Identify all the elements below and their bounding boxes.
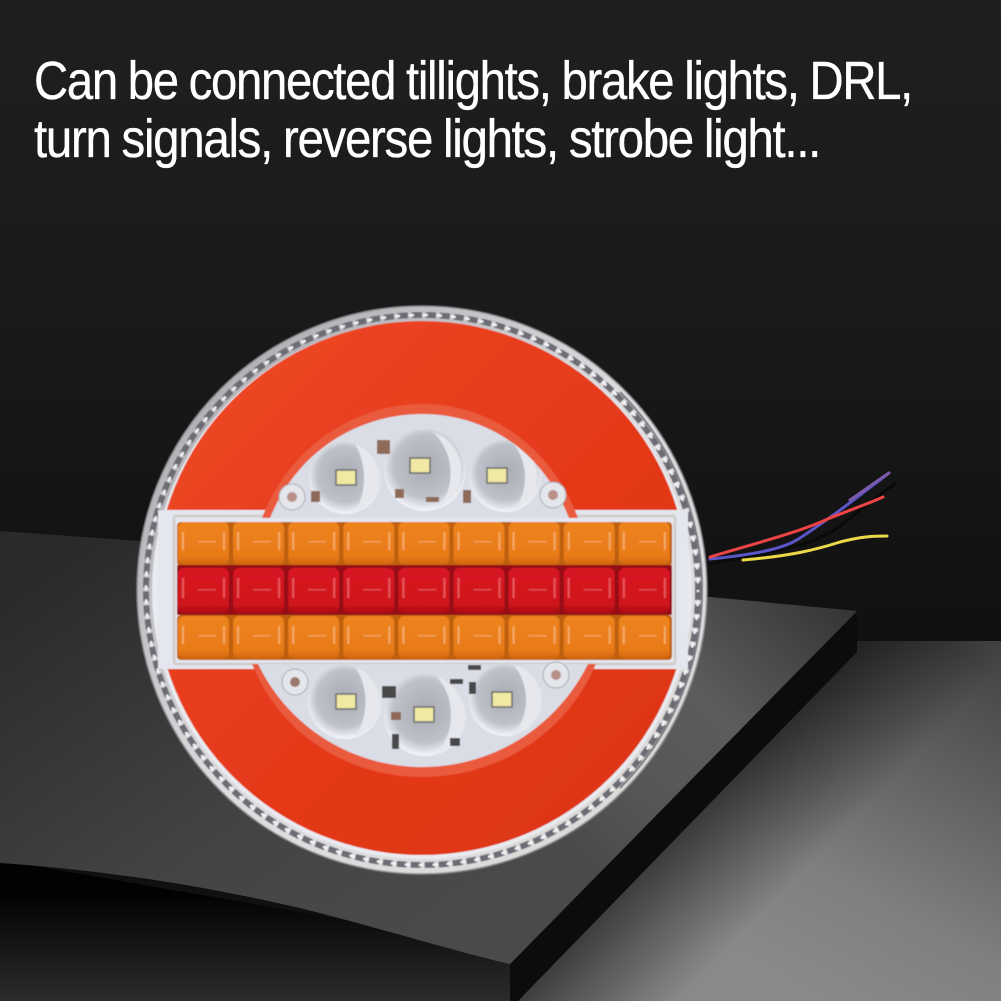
heading — [34, 51, 912, 169]
slab side face — [510, 611, 857, 1001]
lower LED window — [252, 662, 596, 777]
upper LED chips — [336, 458, 507, 485]
orange bar bottom — [177, 615, 672, 660]
clear outer rim — [137, 306, 707, 874]
orange bar top — [177, 522, 672, 566]
lower red ring segment — [167, 668, 677, 856]
upper red ring segment — [166, 320, 678, 511]
floor surface — [500, 641, 1001, 1001]
tail light lamp — [137, 306, 707, 874]
clear strip frames — [174, 516, 675, 664]
lower left shadow area — [0, 860, 520, 1001]
slab top surface — [0, 531, 857, 964]
upper LED window — [262, 404, 578, 518]
upper lenses — [309, 429, 541, 514]
lower screws — [282, 662, 569, 695]
centre light strip housing — [158, 510, 688, 669]
wires — [710, 473, 895, 564]
lower lenses — [308, 664, 542, 756]
upper screws — [279, 482, 566, 510]
heading: turn signals, reverse lights, strobe light... — [34, 109, 820, 169]
red bar — [177, 565, 672, 615]
upper components — [311, 440, 471, 503]
lower LED chips — [336, 692, 512, 722]
lower components — [382, 665, 481, 749]
